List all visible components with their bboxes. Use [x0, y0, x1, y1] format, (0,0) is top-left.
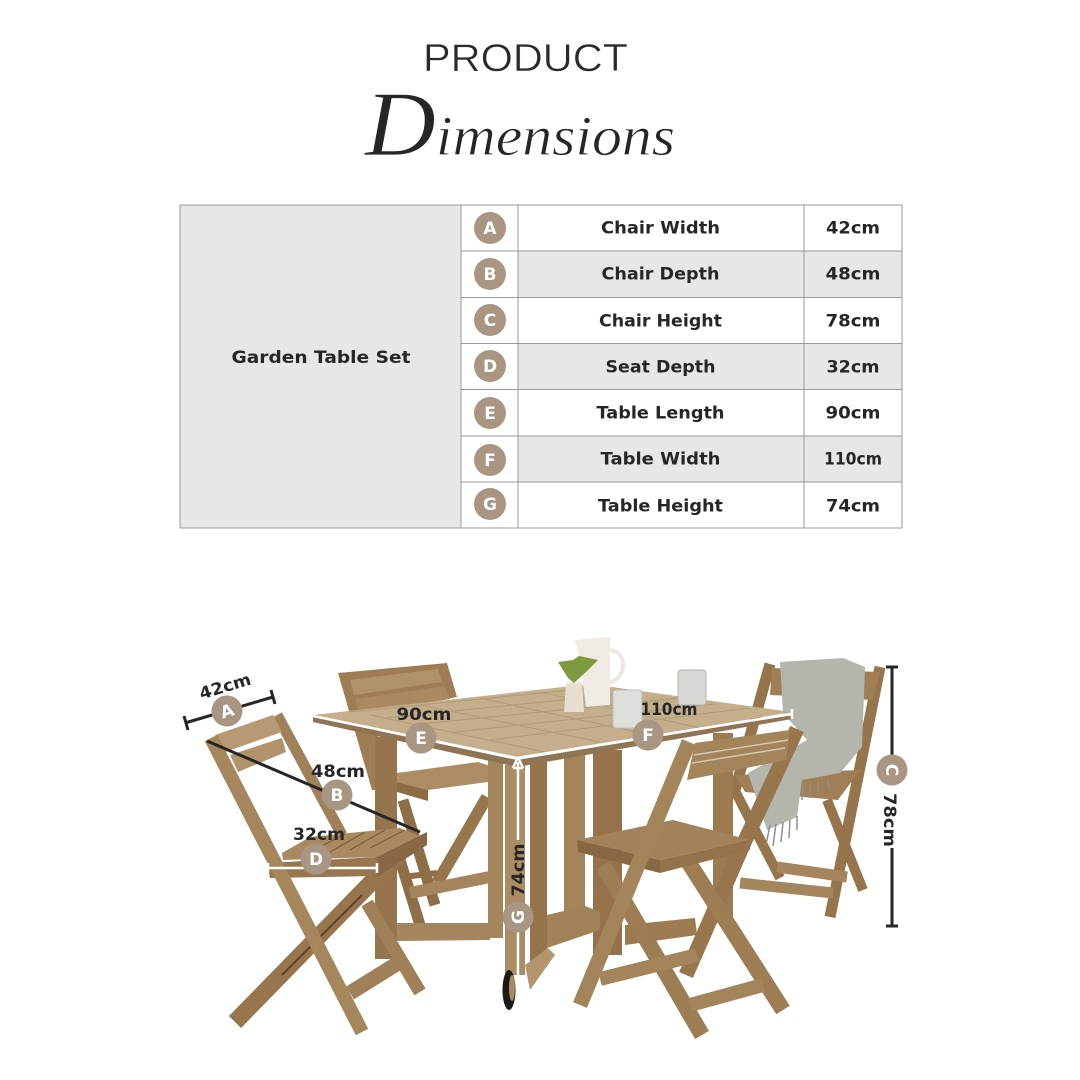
- dimension C: chair height: C: [881, 764, 901, 776]
- dimension B: chair depth: 48cm: [311, 762, 365, 781]
- back left chair: [338, 663, 490, 925]
- row A: chair width: Chair Width: [601, 218, 720, 238]
- glass left: [613, 690, 642, 728]
- row D: seat depth: [474, 350, 880, 382]
- dimension A: chair width: 42cm: [197, 670, 253, 703]
- dimension C: chair height: 78cm: [880, 793, 899, 847]
- blanket: [748, 658, 865, 846]
- row A: chair width: [474, 212, 880, 244]
- row E: table length: Table Length: [596, 404, 724, 422]
- row E: table length: E: [484, 404, 496, 424]
- dimension B: chair depth: B: [331, 786, 343, 806]
- dimension G: table height: 74cm: [509, 844, 528, 896]
- row D: seat depth: 32cm: [826, 358, 880, 376]
- table base: [375, 733, 733, 1010]
- panel: product name: [180, 205, 461, 528]
- row F: table width: 110cm: [824, 450, 882, 468]
- dimensions table: [180, 205, 902, 528]
- row C: chair height: Chair Height: [599, 312, 722, 330]
- back right chair: [733, 664, 880, 917]
- title: dimensions script: Dimensions: [363, 73, 675, 175]
- dimension E: table length: 90cm: [396, 705, 452, 724]
- row E: table length: 90cm: [826, 404, 880, 422]
- wheel: [502, 970, 516, 1010]
- row D: seat depth: D: [483, 357, 497, 377]
- row D: seat depth: Seat Depth: [606, 358, 716, 376]
- row C: chair height: C: [484, 311, 496, 331]
- dimension B: chair depth: [207, 741, 420, 832]
- row B: chair depth: B: [484, 265, 496, 285]
- left front chair: [211, 715, 427, 1032]
- row E: table length: [474, 397, 880, 429]
- dimension E: table length: E: [415, 729, 427, 749]
- dimension D: seat depth: [268, 825, 377, 874]
- vase with plant: [558, 656, 598, 712]
- row G: table height: [474, 488, 880, 520]
- row shading: [518, 251, 902, 482]
- row A: chair width: A: [483, 219, 497, 239]
- dimension D: seat depth: 32cm: [293, 825, 345, 844]
- dimension G: table height: [502, 757, 534, 1000]
- row G: table height: 74cm: [826, 496, 880, 516]
- dimension F: table width: F: [642, 726, 654, 746]
- dimension C: chair height: [876, 667, 908, 926]
- title: product: PRODUCT: [423, 37, 628, 80]
- dimension A: chair width: A: [218, 700, 237, 723]
- panel: product name: Garden Table Set: [232, 348, 411, 367]
- row F: table width: F: [484, 451, 496, 471]
- dimension E: table length: [313, 705, 517, 758]
- row F: table width: Table Width: [600, 450, 720, 468]
- dimension G: table height: G: [509, 910, 529, 924]
- row A: chair width: 42cm: [826, 218, 880, 238]
- row G: table height: G: [483, 495, 497, 515]
- dimension D: seat depth: D: [309, 850, 323, 870]
- glass right: [678, 670, 706, 705]
- row C: chair height: [474, 304, 880, 336]
- dimension A: chair width: [184, 670, 275, 730]
- table top: [313, 684, 792, 767]
- jug: [575, 637, 623, 707]
- row B: chair depth: 48cm: [826, 264, 880, 284]
- furniture illustration: [211, 637, 880, 1035]
- row B: chair depth: [474, 258, 880, 290]
- dimension F: table width: 110cm: [640, 700, 698, 719]
- row B: chair depth: Chair Depth: [602, 264, 720, 284]
- row G: table height: Table Height: [598, 496, 723, 516]
- dimension F: table width: [517, 700, 792, 758]
- right front chair: [577, 729, 797, 1035]
- row F: table width: [474, 444, 882, 476]
- row C: chair height: 78cm: [826, 312, 880, 330]
